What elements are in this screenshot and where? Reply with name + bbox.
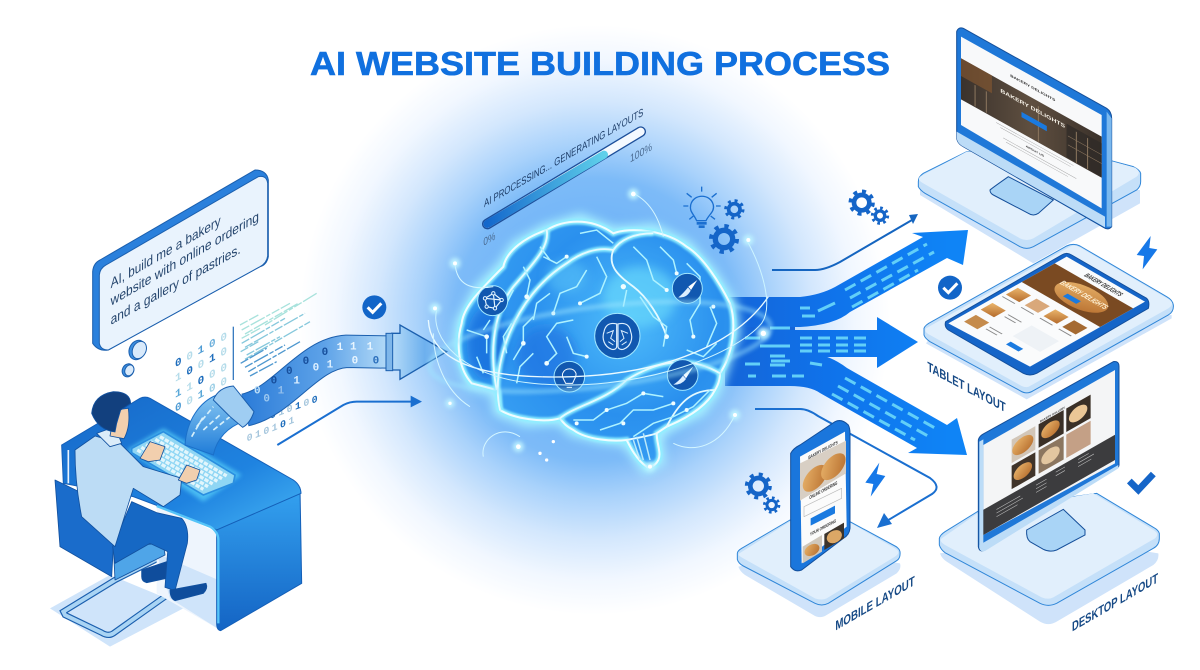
arrow: layout data streams [725,214,968,528]
lower digits: 0 [312,394,318,408]
progress 100%: 100% [630,140,652,165]
desktop stand [1027,509,1085,551]
lower digits: 0 [262,412,268,426]
progress bar [483,105,652,249]
binary digit column: 0 [209,380,216,397]
prompt text: website with online ordering [110,208,259,310]
pipe digits: 1 [327,359,334,371]
stream to upper right [725,230,968,327]
code lines [233,293,317,380]
icon: gears [747,474,779,512]
panel: top desktop layout [850,28,1173,399]
pipe digits: 0 [286,366,293,378]
tablet [945,253,1149,375]
pipe digits: 1 [350,341,357,353]
stream dashes [745,244,935,440]
desktop monitor [978,362,1119,551]
label: desktop layout: DESKTOP LAYOUT [1072,571,1158,635]
platform [918,152,1141,263]
face [110,408,129,439]
binary digit column: 0 [175,354,182,371]
brain halo [458,220,733,467]
chair base [63,555,165,635]
pipe digits: 0 [303,356,309,368]
energy orbit rings [425,193,775,457]
panel: user at desk with prompt [50,170,447,647]
arrow: thin input arrow [277,396,422,445]
tablet website page: BAKERY DELIGHTS [1081,273,1125,298]
binary digit column: 1 [198,386,204,403]
arrow: thin upper output arrow [772,220,912,270]
progress 0%: 0% [483,229,496,249]
tablet screen [948,257,1145,367]
glowing sparks [430,189,769,472]
monitor stand [990,177,1053,215]
icon: lightbulb badge [554,361,585,392]
binary digit column: 0 [186,348,193,365]
floor shadow [50,575,187,647]
lower digits: 1 [295,400,301,414]
icon: paint brush badge top [672,273,702,303]
binary digit column: 0 [198,372,204,389]
desktop website page [983,377,1115,535]
binary digit column: 0 [198,356,204,373]
far shoe [142,562,167,583]
legs [113,502,188,591]
brain lobes [493,230,720,440]
lower digits: 1 [253,415,259,429]
phone page text: BAKERY DELIGHTS [808,440,838,461]
binary digit column: 1 [175,369,182,386]
icon: gear large [711,226,737,252]
lower digits: 0 [303,397,309,411]
lower digits: 1 [278,406,284,420]
binary digit column: 0 [209,366,216,383]
phone form [804,488,842,526]
person [55,392,207,601]
monitor [957,28,1112,229]
pipe spout [185,395,243,455]
pipe digits: 1 [367,341,374,353]
prompt text: AI, build me a bakery [111,213,221,292]
brain outline [459,222,733,467]
pipe digits: 1 [293,375,300,387]
progress label: AI PROCESSING... GENERATING LAYOUTS [484,105,643,210]
chair seat [113,543,165,580]
binary digit column: 0 [186,393,193,409]
stream to tablet [725,317,918,368]
platform: desktop [939,493,1159,624]
tablet website page: BAKERY DELIGHTS [1057,280,1110,311]
binary digit column: 1 [209,350,216,367]
tablet website page [958,258,1142,363]
icon: brain badge centre [595,313,640,359]
hands [140,442,165,462]
pipe collar [213,386,254,427]
phone page text [808,440,838,538]
prompt text: and a gallery of pastries. [111,241,241,329]
binary digit column: 1 [186,379,193,395]
desk [62,397,302,631]
data pipe [185,325,447,455]
binary digit column: 1 [175,385,182,402]
pipe digits: 0 [373,355,379,367]
pipe digits: 1 [337,342,344,354]
binary digit column: 0 [220,360,227,377]
pipe digits: 0 [263,394,270,406]
brain nodes [484,255,715,425]
phone page text: YOUR ORDERING [810,518,836,538]
near shoe [170,583,207,601]
icon: check badge [938,276,962,300]
label: tablet layout: TABLET LAYOUT [927,359,1006,416]
neck [97,427,122,447]
chair back [55,480,113,577]
blue glow behind brain [290,20,900,620]
keyboard glow [127,428,242,502]
pipe arrowhead [392,325,447,379]
binary digit column: 0 [220,329,227,346]
phone [791,421,850,571]
lower digits: 1 [272,421,278,435]
pipe digits [254,341,379,406]
icon: check badge [362,295,386,319]
merged stream block [725,297,795,386]
icon: lightning bolt [865,463,885,497]
pipe digits: 0 [271,375,277,387]
icon: lightning bolt [1137,236,1157,269]
lower digits: 1 [288,415,294,429]
stream to lower right [725,353,967,455]
brain body [459,222,733,467]
pipe digits: 0 [313,363,319,375]
monitor screen [961,37,1102,208]
speech bubble [93,170,268,350]
panel: lower devices [737,359,1159,635]
desktop screen [983,370,1115,535]
monitor website page: BAKERY DELIGHTS [1000,87,1065,130]
pipe digits: 0 [352,355,358,367]
binary digit column: 1 [175,419,182,431]
icon: network node badge [478,286,508,316]
monitor website page: ABOUT US [1026,144,1044,158]
lower digits: 0 [263,425,269,439]
icon: check mark [1129,474,1153,490]
brain outline glow [459,222,733,467]
hair [92,392,131,432]
icon: paint brush badge bottom [667,360,698,390]
pipe digits: 0 [254,385,261,397]
lower digits: 0 [270,409,276,423]
icon: lightbulb [683,187,721,227]
thought bubbles [120,338,149,379]
lower digits: 0 [280,418,286,432]
lower digits: 0 [247,432,253,446]
phone thumbnails [802,523,844,563]
shirt torso and arm [75,436,182,547]
binary digit column: 0 [220,374,227,391]
label: mobile layout: MOBILE LAYOUT [835,574,915,634]
phone page text: ONLINE ORDERING [809,481,837,501]
arrow: thin lower output arrow [755,409,937,522]
lower digits: 0 [287,403,293,417]
monitor website page: BAKERY DELIGHTS [1010,74,1056,103]
binary digit column: 0 [175,399,182,416]
pipe digits: 0 [322,347,328,359]
binary digit column: 0 [186,363,193,379]
platform: mobile [737,520,900,617]
lower digits: 1 [255,428,261,442]
platform: tablet [924,244,1173,399]
croissant photo [798,441,850,501]
panel: AI brain [425,105,775,472]
keyboard [132,432,235,495]
brain lobe glow [493,230,720,418]
brain circuit traces [467,230,717,460]
binary digit column: 0 [220,344,227,361]
binary digit column: 1 [198,342,204,358]
brain inner shading [467,260,677,387]
icon: gears [850,191,888,223]
binary digit column: 0 [209,336,216,352]
binary digit column [175,329,227,431]
title: AI WEBSITE BUILDING PROCESS [310,45,890,82]
desktop website page: BAKERY GALLERY [1040,405,1065,423]
monitor website page [961,46,1102,195]
lower digits [247,394,318,446]
icon: gear small [726,201,743,218]
pipe digits: 1 [278,385,285,397]
phone screen [800,432,847,563]
